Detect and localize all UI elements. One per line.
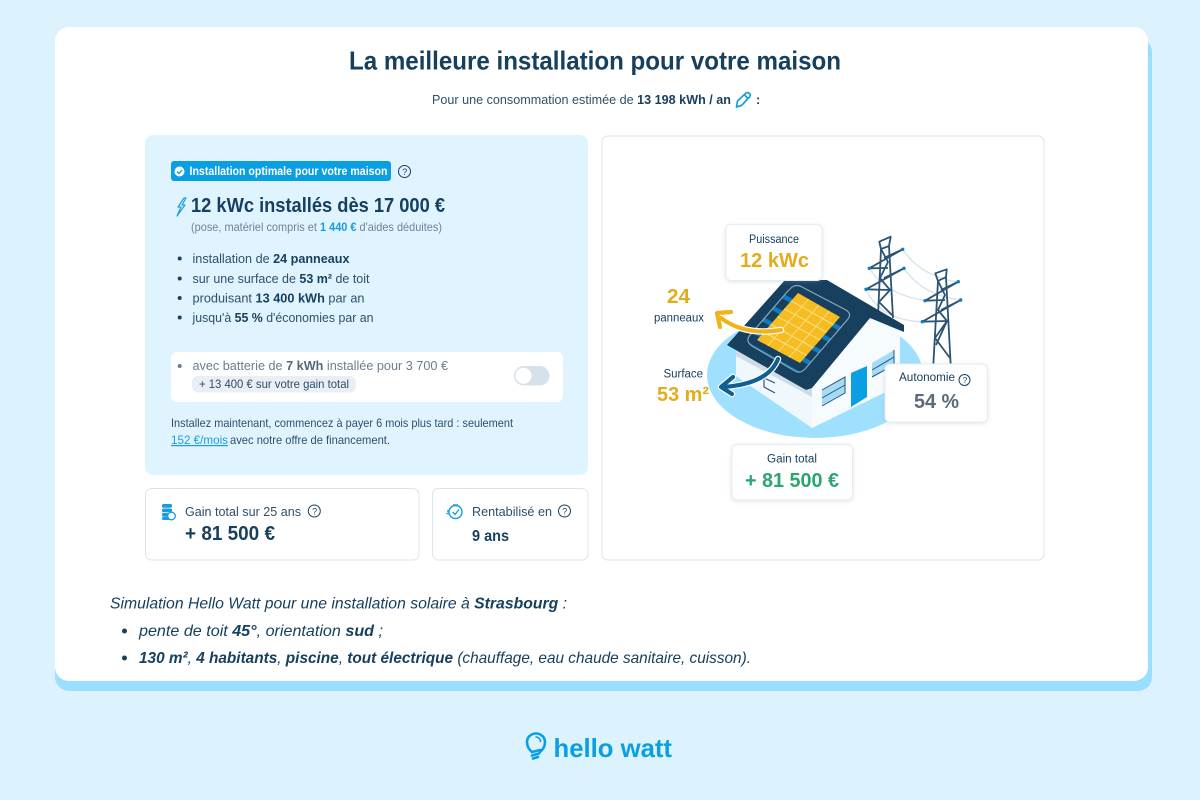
main card xyxy=(55,27,1152,691)
value: total gain: + 81 500 € xyxy=(185,523,275,545)
icon: lightning bolt xyxy=(177,198,186,216)
badge: optimal installation xyxy=(171,161,391,181)
battery option: + 13 400 € sur votre gain total xyxy=(199,377,349,391)
icon: stopwatch xyxy=(446,505,462,518)
icon: help xyxy=(398,166,410,178)
label: surface: 53 m² xyxy=(657,384,709,406)
arrow: panels xyxy=(717,312,781,332)
value: payback years: 9 ans xyxy=(472,528,509,545)
panel: optimal installation xyxy=(145,135,588,475)
financing note: 152 €/mois xyxy=(171,433,228,447)
feature list xyxy=(178,252,374,325)
subtitle: estimated consumption: : xyxy=(756,93,760,107)
panel: total gain: Gain total sur 25 ans xyxy=(185,505,301,519)
panel: payback: Rentabilisé en xyxy=(472,505,552,519)
illustration: house with solar panels xyxy=(707,237,962,438)
financing note: avec notre offre de financement. xyxy=(230,433,390,447)
price note: (pose, matériel compris et 1 440 € d'aides déduites) xyxy=(191,220,442,234)
toggle xyxy=(514,366,550,386)
solar panel xyxy=(757,293,840,363)
house walls xyxy=(736,316,900,428)
heading: 12 kWc price: 12 kWc installés dès 17 000 € xyxy=(191,195,445,217)
ground ellipse xyxy=(707,312,923,438)
callout: total gain: Gain total xyxy=(767,454,817,466)
icon: light bulb xyxy=(527,734,545,758)
label: panels count xyxy=(654,286,704,324)
icon: help: ? xyxy=(562,506,567,516)
simulation notes: 130 m², 4 habitants, piscine, tout électrique (chauffage, eau chaude sanitaire, cuisson). xyxy=(139,650,751,667)
logo: hello watt: hello watt xyxy=(554,733,672,763)
icon: help xyxy=(558,505,570,517)
financing note xyxy=(171,416,514,447)
pylon: back xyxy=(864,237,906,318)
panel: illustration xyxy=(602,136,1044,560)
roof xyxy=(727,280,904,390)
simulation notes: pente de toit 45°, orientation sud ; xyxy=(138,623,383,640)
icon: help: ? xyxy=(312,506,317,516)
icon: help xyxy=(308,505,320,517)
feature list: produisant 13 400 kWh par an xyxy=(192,292,365,306)
battery option: avec batterie de 7 kWh installée pour 3 700 € xyxy=(192,359,448,373)
callout: autonomy: Autonomie xyxy=(899,372,955,384)
badge: optimal installation: Installation optimale pour votre maison xyxy=(190,166,388,178)
callout: power xyxy=(726,224,822,280)
callout: autonomy xyxy=(885,364,988,422)
feature list: installation de 24 panneaux xyxy=(192,252,350,266)
callout: power: 12 kWc xyxy=(740,250,809,272)
feature list: jusqu'à 55 % d'économies par an xyxy=(192,311,374,325)
icon: help: ? xyxy=(402,167,407,177)
callout: autonomy: ? xyxy=(963,376,968,385)
financing note: Installez maintenant, commencez à payer 6 mois plus tard : seulement xyxy=(171,416,514,430)
label: surface xyxy=(657,368,709,406)
power lines xyxy=(866,249,960,322)
windows and door xyxy=(764,350,894,407)
callout: autonomy: 54 % xyxy=(914,391,959,413)
battery option xyxy=(171,352,563,402)
label: panels count: 24 xyxy=(667,286,691,308)
callout: power: Puissance xyxy=(749,234,799,246)
icon: pencil xyxy=(736,93,750,107)
simulation notes: Simulation Hello Watt pour une installation solaire à Strasbourg : xyxy=(110,596,567,612)
arrow: surface xyxy=(721,359,778,394)
panel: total gain xyxy=(146,488,419,560)
label: surface: Surface xyxy=(664,368,703,380)
feature list: sur une surface de 53 m² de toit xyxy=(192,272,370,286)
label: panels count: panneaux xyxy=(654,312,704,324)
callout: total gain xyxy=(732,444,852,500)
solar panel frame xyxy=(747,284,850,373)
subtitle: estimated consumption: Pour une consommation estimée de 13 198 kWh / an xyxy=(432,93,731,107)
panel: payback xyxy=(432,488,588,560)
pylon: front xyxy=(921,269,962,365)
simulation notes xyxy=(110,596,751,667)
callout: total gain: + 81 500 € xyxy=(745,470,839,492)
title: La meilleure installation pour votre maison xyxy=(349,46,841,76)
icon: coins xyxy=(162,504,175,520)
